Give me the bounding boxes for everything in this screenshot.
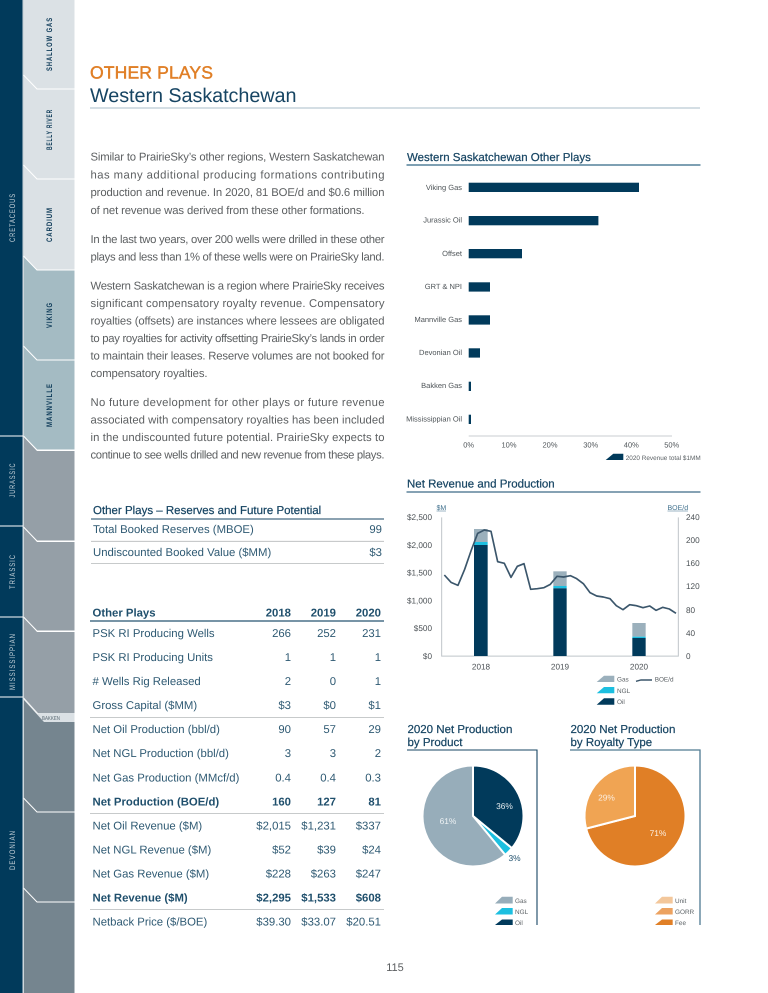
pie chart xyxy=(585,766,686,867)
left axis labels: $1,500 xyxy=(407,569,432,578)
table: other plays metrics: Net Oil Revenue ($M) xyxy=(92,820,202,832)
table: other plays metrics xyxy=(90,608,384,928)
table: other plays metrics: Net Gas Revenue ($M) xyxy=(92,868,209,880)
tab: cardium xyxy=(24,166,74,270)
paragraph 4: associated with compensatory royalties has been included xyxy=(90,414,384,426)
bar chart: 0% xyxy=(463,440,474,450)
paragraph 4: continue to see wells drilled and new revenue from these plays. xyxy=(90,450,384,462)
row: net revenue: $1,533 xyxy=(301,892,336,904)
table: other plays metrics: 2 xyxy=(285,676,291,688)
body text xyxy=(90,152,385,462)
chart: net production by royalty type xyxy=(570,724,700,927)
tab: viking xyxy=(24,257,74,360)
legend: 2020 revenue total xyxy=(606,454,701,462)
table: reserves and future potential: Other Plays – Reserves and Future Potential xyxy=(93,505,321,517)
bar chart xyxy=(406,183,680,449)
table: other plays metrics: 0.4 xyxy=(275,772,291,784)
table: other plays metrics: 0.3 xyxy=(365,772,381,784)
bar chart: GRT & NPI xyxy=(425,282,462,291)
table: other plays metrics: Net NGL Revenue ($M) xyxy=(92,844,211,856)
left axis labels xyxy=(407,513,432,661)
pie labels: 36% xyxy=(496,801,513,811)
tab: devonian xyxy=(24,700,74,993)
axis unit labels xyxy=(436,504,688,512)
pie chart xyxy=(422,766,523,866)
legend: Unit xyxy=(675,898,687,905)
paragraph 2: plays and less than 1% of these wells were on PrairieSky land. xyxy=(90,252,384,264)
year labels xyxy=(472,662,649,672)
bar chart: 40% xyxy=(624,440,639,450)
pie labels: 29% xyxy=(598,792,615,802)
table: other plays metrics: $1,231 xyxy=(301,820,336,832)
table: reserves and future potential: $3 xyxy=(369,547,382,559)
paragraph 3: Western Saskatchewan is a region where PrairieSky receives xyxy=(90,280,385,292)
tab: belly river xyxy=(24,76,74,179)
table: other plays metrics: 0 xyxy=(330,676,336,688)
legend: BOE/d xyxy=(655,676,674,684)
paragraph 4: in the undiscounted future potential. PrairieSky expects to xyxy=(90,432,384,444)
legend: NGL xyxy=(617,688,631,695)
chart heading: by Royalty Type xyxy=(570,737,652,749)
pie labels: 61% xyxy=(440,816,457,826)
table: other plays metrics: $52 xyxy=(272,844,291,856)
paragraph 3: to maintain their leases. Reserve volumes are not booked for xyxy=(90,350,385,362)
paragraph 3 xyxy=(90,280,385,380)
legend xyxy=(495,897,529,927)
table: other plays metrics: Net Oil Production (bbl/d) xyxy=(92,724,220,736)
label: period names: JURASSIC xyxy=(8,462,17,498)
right axis labels: 80 xyxy=(686,606,696,615)
table: other plays metrics: 90 xyxy=(278,724,291,736)
right axis labels: 240 xyxy=(686,513,700,522)
tab: triassic xyxy=(24,527,74,631)
chart: western saskatchewan other plays xyxy=(406,152,701,462)
right axis labels: 120 xyxy=(686,582,700,591)
table: other plays metrics: $228 xyxy=(266,868,291,880)
paragraph 4: No future development for other plays or future revenue xyxy=(90,397,384,409)
bar chart: Mississippian Oil xyxy=(406,414,462,424)
legend xyxy=(597,676,674,706)
bar chart: Jurassic Oil xyxy=(423,216,462,224)
bar chart: Mannville Gas xyxy=(414,315,462,324)
bar chart: Viking Gas xyxy=(426,183,462,192)
pie labels: 3% xyxy=(508,853,521,863)
legend: Gas xyxy=(617,676,629,684)
bar chart: Devonian Oil xyxy=(419,348,462,357)
table: other plays metrics: 0.4 xyxy=(320,772,336,784)
axes xyxy=(442,517,678,656)
paragraph 4 xyxy=(90,397,384,462)
table: other plays metrics: 266 xyxy=(272,628,291,640)
title: OTHER PLAYS xyxy=(90,62,213,82)
legend: Gas xyxy=(515,898,527,905)
title xyxy=(90,62,700,108)
table: other plays metrics: PSK RI Producing Wells xyxy=(92,628,215,640)
bar chart: 30% xyxy=(583,440,599,450)
label: period names: CRETACEOUS xyxy=(8,193,17,242)
paragraph 3: compensatory royalties. xyxy=(90,368,208,380)
table header: 2020 xyxy=(356,608,381,620)
paragraph 3: significant compensatory royalty revenue. Compensatory xyxy=(90,298,385,310)
legend: 2020 revenue total: 2020 Revenue total $1MM xyxy=(626,455,701,462)
chart heading xyxy=(570,724,700,925)
table: reserves and future potential: Undiscounted Booked Value ($MM) xyxy=(93,547,271,559)
paragraph 3: to pay royalties for activity offsetting PrairieSky’s lands in order xyxy=(90,333,385,345)
sidebar navigation xyxy=(0,0,74,993)
paragraph 1: Similar to PrairieSky’s other regions, Western Saskatchewan xyxy=(90,152,384,164)
legend: Oil xyxy=(515,920,523,927)
table: other plays metrics: 3 xyxy=(285,748,291,760)
label: period names xyxy=(8,193,17,870)
right axis labels: 200 xyxy=(686,536,700,545)
table: reserves and future potential xyxy=(91,505,384,564)
paragraph 1: of net revenue was derived from these other formations. xyxy=(90,205,364,217)
year labels: 2020 xyxy=(630,662,649,672)
paragraph 3: royalties (offsets) are instances where lessees are obligated xyxy=(90,316,384,328)
paragraph 2 xyxy=(90,234,385,264)
table: other plays metrics: Gross Capital ($MM) xyxy=(92,700,197,712)
left axis labels: $0 xyxy=(423,652,432,661)
table: other plays metrics: $0 xyxy=(323,700,336,712)
stacked bars xyxy=(474,529,646,656)
tab: jurassic xyxy=(24,437,74,541)
table: other plays metrics: $24 xyxy=(362,844,381,856)
label: period names: TRIASSIC xyxy=(8,554,17,589)
table: other plays metrics: $20.51 xyxy=(346,916,381,928)
table: other plays metrics: 3 xyxy=(330,748,336,760)
table: other plays metrics: 1 xyxy=(375,676,381,688)
table header: 2019 xyxy=(311,608,336,620)
table: other plays metrics: Netback Price ($/BOE) xyxy=(92,916,207,928)
legend xyxy=(655,897,695,927)
row: net production: 81 xyxy=(368,796,381,808)
left axis labels: $2,500 xyxy=(407,513,432,522)
right axis labels xyxy=(686,513,700,661)
pie labels: 71% xyxy=(650,828,667,838)
table: other plays metrics: # Wells Rig Released xyxy=(92,676,201,688)
right axis labels: 40 xyxy=(686,629,696,638)
table: reserves and future potential: Total Booked Reserves (MBOE) xyxy=(93,524,254,536)
boe/d line xyxy=(444,530,676,613)
label: bakken: BAKKEN xyxy=(42,716,60,722)
bar chart: Offset xyxy=(442,249,463,258)
left axis labels: $1,000 xyxy=(407,596,432,606)
pie labels xyxy=(440,801,521,863)
bar chart: 50% xyxy=(664,440,680,450)
table: other plays metrics: $1 xyxy=(368,700,381,712)
label: formation names: MANNVILLE xyxy=(45,383,54,427)
right axis labels: 0 xyxy=(686,652,691,661)
paragraph 1 xyxy=(90,152,384,217)
table header xyxy=(92,608,381,620)
table: reserves and future potential: 99 xyxy=(369,524,382,536)
row: net revenue: $2,295 xyxy=(256,892,291,904)
tab: mississippian xyxy=(24,617,74,713)
chart heading: Net Revenue and Production xyxy=(407,478,555,490)
row: net production: 127 xyxy=(317,796,336,808)
row: net revenue: Net Revenue ($M) xyxy=(92,892,188,904)
table: other plays metrics: 2 xyxy=(375,748,381,760)
table: other plays metrics: 231 xyxy=(362,628,381,640)
right axis labels: 160 xyxy=(686,559,700,568)
legend: Oil xyxy=(617,699,625,706)
tab: mannville xyxy=(24,347,74,450)
table: other plays metrics: 1 xyxy=(330,652,336,664)
table: other plays metrics: 252 xyxy=(317,628,336,640)
table: other plays metrics: 1 xyxy=(375,652,381,664)
page number: 115 xyxy=(386,962,404,974)
table: other plays metrics: 57 xyxy=(323,724,336,736)
label: formation names: BELLY RIVER xyxy=(45,109,54,150)
legend: NGL xyxy=(515,909,529,916)
legend: GORR xyxy=(675,909,695,916)
title: Western Saskatchewan xyxy=(90,85,296,107)
bar chart: 20% xyxy=(542,440,558,450)
table: other plays metrics: $39.30 xyxy=(256,916,291,928)
table: other plays metrics: $33.07 xyxy=(301,916,336,928)
table: other plays metrics: Net Gas Production (MMcf/d) xyxy=(92,772,240,784)
table: other plays metrics: 29 xyxy=(368,724,381,736)
paragraph 2: In the last two years, over 200 wells were drilled in these other xyxy=(90,234,385,246)
sidebar: period column xyxy=(0,0,22,993)
row: net production: Net Production (BOE/d) xyxy=(92,796,219,808)
paragraph 1: production and revenue. In 2020, 81 BOE/d and $0.6 million xyxy=(90,187,384,199)
chart: net production by product xyxy=(407,724,537,927)
label: period names: MISSISSIPPIAN xyxy=(8,633,17,690)
table: other plays metrics: $337 xyxy=(356,820,381,832)
table: other plays metrics: PSK RI Producing Units xyxy=(92,652,213,664)
table: other plays metrics: Net NGL Production (bbl/d) xyxy=(92,748,229,760)
tab: shallow gas xyxy=(24,0,74,89)
label: formation names xyxy=(45,17,54,427)
chart heading: by Product xyxy=(408,737,463,749)
left axis labels: $500 xyxy=(414,624,432,633)
left axis labels: $2,000 xyxy=(407,541,432,550)
year labels: 2018 xyxy=(472,662,491,672)
table header: Other Plays xyxy=(92,608,156,620)
table: other plays metrics: $39 xyxy=(317,844,336,856)
label: period names: DEVONIAN xyxy=(8,830,17,870)
year labels: 2019 xyxy=(551,662,570,672)
table header: 2018 xyxy=(266,608,291,620)
chart heading xyxy=(407,724,537,925)
pie labels xyxy=(598,792,667,838)
label: formation names: CARDIUM xyxy=(45,207,54,242)
label: formation names: VIKING xyxy=(45,302,54,328)
row: net production: 160 xyxy=(272,796,291,808)
bar chart: Bakken Gas xyxy=(421,381,462,390)
axis unit labels: BOE/d xyxy=(668,504,688,512)
tab: bakken xyxy=(24,698,74,722)
row: net production xyxy=(92,796,381,808)
chart: net revenue and production xyxy=(406,478,700,706)
table: other plays metrics: $3 xyxy=(278,700,291,712)
table: other plays metrics: $247 xyxy=(356,868,381,880)
bar chart: 10% xyxy=(501,440,517,450)
legend: Fee xyxy=(675,920,686,927)
chart heading: 2020 Net Production xyxy=(570,724,675,736)
row: net revenue: $608 xyxy=(356,892,381,904)
paragraph 1: has many additional producing formations contributing xyxy=(90,169,384,181)
table: other plays metrics: $263 xyxy=(311,868,336,880)
chart heading: 2020 Net Production xyxy=(408,724,512,736)
row: net revenue xyxy=(92,892,381,904)
table: other plays metrics: $2,015 xyxy=(256,820,291,832)
axis unit labels: $M xyxy=(436,504,446,512)
chart heading: Western Saskatchewan Other Plays xyxy=(407,152,591,164)
table: other plays metrics: 1 xyxy=(285,652,291,664)
